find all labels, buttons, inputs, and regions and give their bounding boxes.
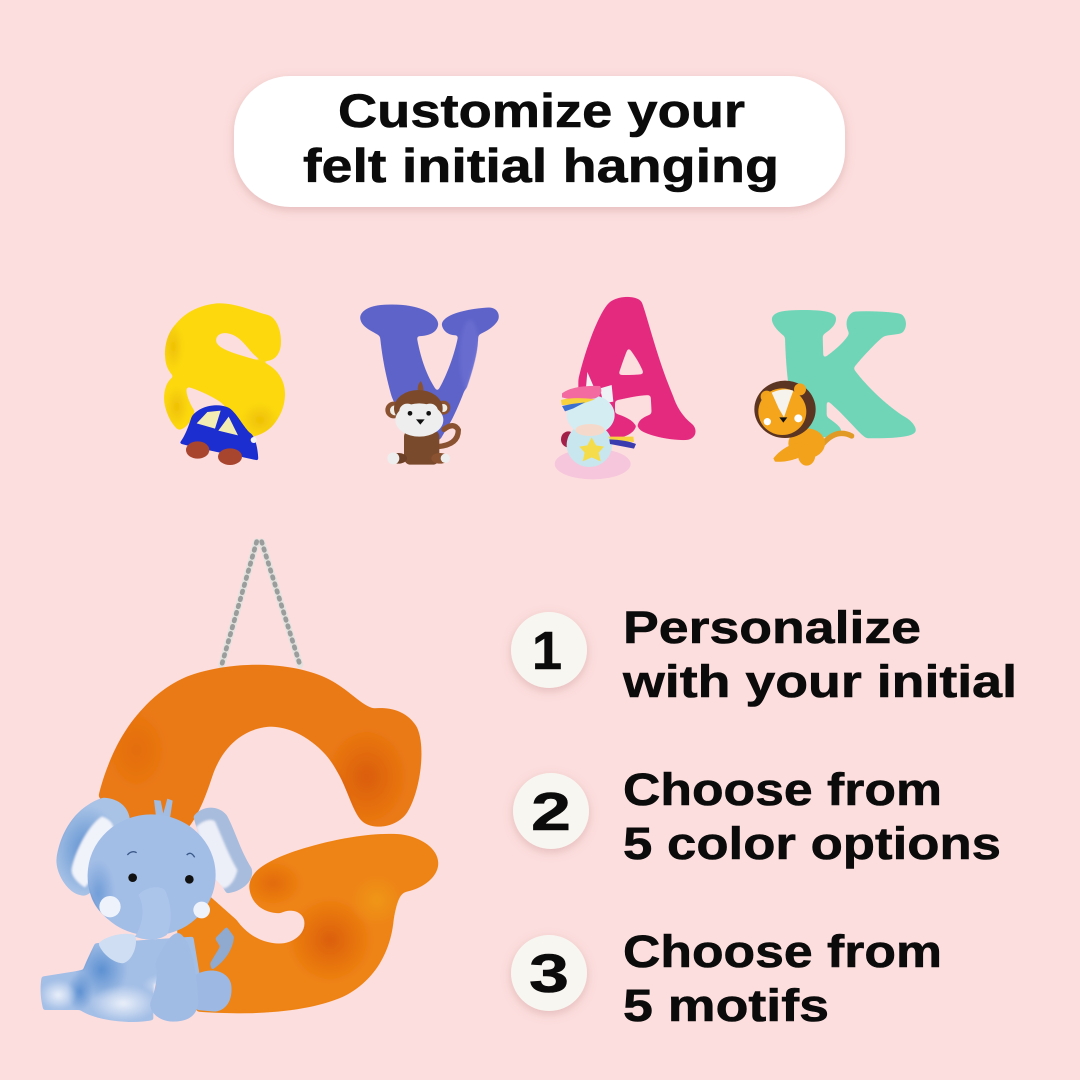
orange felt G lower bowl bbox=[177, 834, 438, 1013]
elephant motif bbox=[40, 798, 252, 1022]
lion motif bbox=[754, 381, 852, 466]
title text: felt initial hanging bbox=[303, 139, 779, 192]
monkey motif bbox=[385, 381, 458, 465]
step 1 bbox=[511, 602, 1017, 707]
pink felt A bbox=[578, 297, 696, 440]
step 3 text: Choose from bbox=[623, 926, 942, 977]
yellow felt S bbox=[163, 303, 285, 437]
step 3 bbox=[511, 926, 942, 1031]
number badge 1: 1 bbox=[532, 621, 562, 681]
elephant left ear bbox=[52, 798, 130, 896]
purple felt V bbox=[360, 304, 499, 440]
step 2 text: 5 color options bbox=[623, 818, 1001, 869]
unicorn motif bbox=[555, 372, 636, 479]
step 1 text bbox=[622, 602, 1017, 707]
elephant front leg bbox=[150, 933, 198, 1022]
title pill bbox=[234, 76, 845, 207]
number badge 3 bbox=[511, 935, 587, 1011]
letter K with lion motif bbox=[754, 310, 916, 466]
step 2 text: Choose from bbox=[623, 764, 942, 815]
car motif bbox=[179, 405, 258, 465]
letter V with monkey motif bbox=[360, 304, 499, 465]
elephant head bbox=[82, 814, 216, 936]
elephant right ear bbox=[193, 808, 252, 893]
large letter G hanging with elephant bbox=[40, 542, 438, 1022]
number badge 2 bbox=[513, 773, 589, 849]
elephant raised arm bbox=[210, 927, 234, 970]
letter S with car motif bbox=[163, 303, 285, 465]
elephant tuft bbox=[154, 799, 173, 818]
step 2 text bbox=[623, 764, 1001, 869]
elephant trunk bbox=[135, 887, 171, 940]
elephant cheeks and eyes bbox=[99, 852, 210, 918]
hanging rope bbox=[222, 542, 300, 665]
orange felt G bbox=[98, 665, 421, 830]
teal felt K bbox=[772, 310, 916, 438]
elephant torso and left leg bbox=[40, 937, 200, 1022]
number badge 2: 2 bbox=[531, 782, 571, 842]
step 2 bbox=[513, 764, 1001, 869]
step 3 text: 5 motifs bbox=[623, 980, 829, 1031]
title text: Customize your bbox=[338, 84, 745, 137]
step 1 text: with your initial bbox=[622, 656, 1017, 707]
elephant right foot bbox=[195, 970, 232, 1012]
number badge 3: 3 bbox=[529, 944, 569, 1004]
letter A with unicorn motif bbox=[555, 297, 696, 479]
number badge 1 bbox=[511, 612, 587, 688]
elephant left arm bbox=[98, 934, 136, 963]
step 1 text: Personalize bbox=[623, 602, 921, 653]
step 3 text bbox=[623, 926, 942, 1031]
title text bbox=[303, 84, 779, 192]
